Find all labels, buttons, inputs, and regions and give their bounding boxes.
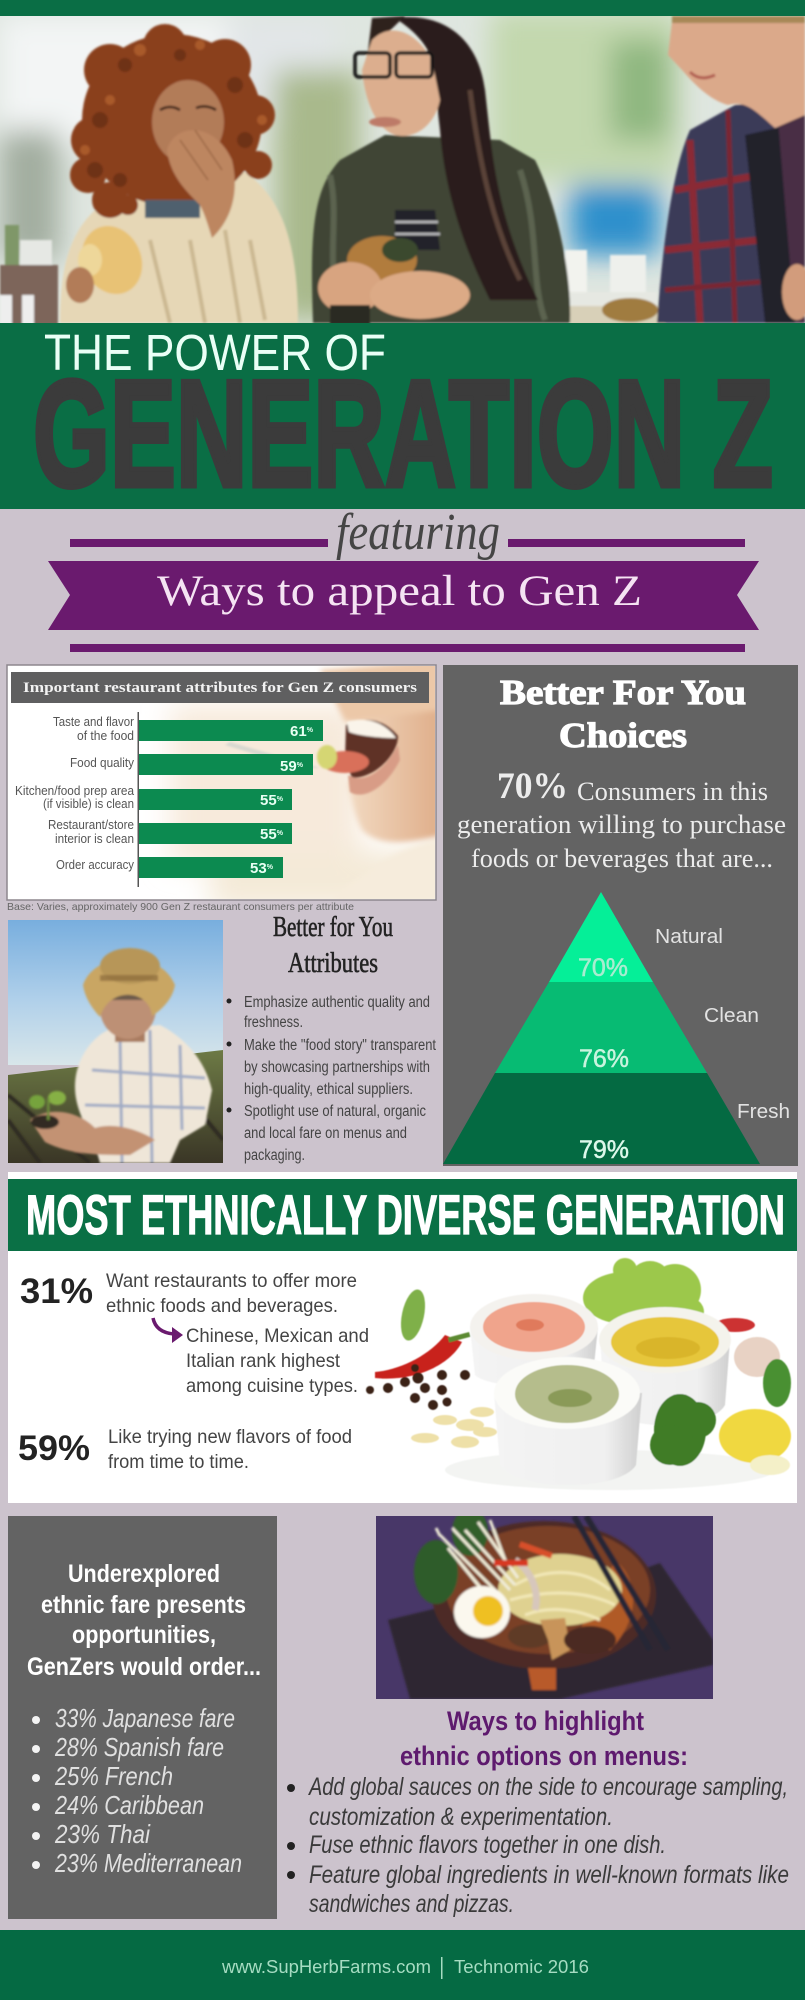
ribbon heading: Ways to appeal to Gen Z xyxy=(157,568,642,615)
pyramid chart xyxy=(443,892,760,1164)
heading: ways to highlight: ethnic options on menus: xyxy=(400,1741,688,1771)
woman two hair xyxy=(395,17,538,300)
photo: mouth eating food xyxy=(170,660,450,910)
70 percent statement xyxy=(457,766,786,873)
cuisine percentage list: 33% Japanese fare xyxy=(55,1703,235,1733)
panel heading xyxy=(27,1560,261,1681)
panel: better for you choices xyxy=(443,665,798,1166)
woman one hand xyxy=(167,130,235,238)
bar values xyxy=(250,723,314,877)
bar values: % xyxy=(297,762,304,769)
featuring ribbon xyxy=(48,504,759,652)
yellow sauce bowl xyxy=(600,1340,730,1425)
woman one burger xyxy=(82,225,144,295)
attributes bullet list: Spotlight use of natural, organic xyxy=(244,1103,426,1120)
bar values: 61 xyxy=(290,723,307,740)
menu tips bullet list: sandwiches and pizzas. xyxy=(309,1890,514,1918)
bar values: 55 xyxy=(260,826,277,843)
woman one hair xyxy=(70,24,275,218)
attributes bullet list: Make the "food story" transparent xyxy=(244,1037,437,1054)
attributes bullet list xyxy=(226,994,437,1164)
bar labels: Order accuracy xyxy=(56,857,134,872)
bar labels: (if visible) is clean xyxy=(43,796,134,811)
bar values: % xyxy=(267,864,274,871)
fence xyxy=(563,248,588,292)
base note: Base: Varies, approximately 900 Gen Z restaurant consumers per attribute xyxy=(7,902,354,913)
bar values: % xyxy=(307,727,314,734)
woman two face xyxy=(362,30,440,136)
panel: underexplored ethnic fare xyxy=(8,1516,277,1919)
photo: farmer holding seedling xyxy=(8,920,223,1163)
pyramid chart: 70% xyxy=(578,954,628,982)
chart header xyxy=(11,672,429,703)
cuisine note: Italian rank highest xyxy=(186,1350,341,1372)
choices heading xyxy=(500,673,746,755)
attributes bullet list: and local fare on menus and xyxy=(244,1125,407,1142)
bar labels: Kitchen/food prep area xyxy=(15,783,135,798)
bar labels: of the food xyxy=(77,728,134,743)
70 percent statement: 70% xyxy=(497,766,568,807)
woman one face xyxy=(152,80,224,164)
stat: 59 percent: from time to time. xyxy=(108,1451,249,1473)
panel heading: ethnic fare presents xyxy=(41,1591,246,1619)
panel heading: Underexplored xyxy=(68,1560,220,1588)
choices heading: Better For You xyxy=(500,673,746,712)
bar values: % xyxy=(277,796,284,803)
planter xyxy=(0,265,58,325)
cuisine percentage list: 23% Thai xyxy=(54,1819,151,1849)
panel: restaurant attributes chart: Important restaurant attributes for Gen Z consumers xyxy=(23,680,417,696)
woman two burger and hands xyxy=(347,236,417,284)
attributes bullet list: Emphasize authentic quality and xyxy=(244,994,430,1011)
cuisine percentage list: 28% Spanish fare xyxy=(54,1732,224,1762)
title: the power of: THE POWER OF xyxy=(44,324,386,381)
heading: better for you attributes: Attributes xyxy=(288,948,378,979)
stat: 59 percent: Like trying new flavors of food xyxy=(108,1426,352,1448)
panel: restaurant attributes chart xyxy=(7,660,450,910)
menu tips bullet list: Fuse ethnic flavors together in one dish. xyxy=(309,1831,666,1859)
attributes bullet list: freshness. xyxy=(244,1014,303,1031)
icon: purple arrow xyxy=(153,1318,183,1343)
title band xyxy=(0,323,805,519)
heading: better for you attributes xyxy=(273,912,393,979)
green sauce bowl xyxy=(494,1393,642,1485)
bar values: 59 xyxy=(280,758,297,775)
footer xyxy=(0,1930,805,2000)
bar values: 55 xyxy=(260,792,277,809)
attributes bullet list: packaging. xyxy=(244,1147,305,1164)
stat: 59 percent xyxy=(18,1426,352,1473)
70 percent statement: Consumers in this xyxy=(577,777,768,806)
stat: 59 percent: 59% xyxy=(18,1429,90,1468)
footer: Technomic 2016 xyxy=(454,1957,589,1977)
pyramid chart: 79% xyxy=(579,1136,629,1164)
70 percent statement: foods or beverages that are... xyxy=(471,844,773,873)
stat: 31 percent: Want restaurants to offer more xyxy=(106,1270,357,1292)
section heading xyxy=(8,1179,797,1251)
woman one sweater xyxy=(60,172,298,323)
pyramid labels xyxy=(655,926,790,1123)
top green bar xyxy=(0,0,805,16)
attributes bullet list: by showcasing partnerships with xyxy=(244,1059,430,1076)
menu tips bullet list: customization & experimentation. xyxy=(309,1803,613,1831)
photo: sauces in bowls xyxy=(366,1258,791,1490)
heading: ways to highlight: Ways to highlight xyxy=(447,1706,644,1736)
cuisine note: Chinese, Mexican and xyxy=(186,1325,369,1347)
bar labels: Food quality xyxy=(70,755,134,770)
pyramid labels: Fresh xyxy=(737,1101,790,1123)
heading: ways to highlight xyxy=(400,1706,688,1771)
70 percent statement: generation willing to purchase xyxy=(457,810,786,839)
man on right xyxy=(656,103,780,323)
panel: most ethnically diverse generation xyxy=(8,1172,797,1503)
stat: 31 percent xyxy=(20,1270,357,1317)
bar labels xyxy=(15,714,135,872)
bar chart xyxy=(139,720,323,878)
choices heading: Choices xyxy=(559,716,687,755)
cuisine percentage list: 24% Caribbean xyxy=(54,1790,204,1820)
footer: www.SupHerbFarms.com xyxy=(221,1957,431,1977)
cuisine percentage list xyxy=(32,1703,242,1878)
cuisine percentage list: 25% French xyxy=(54,1761,173,1791)
panel heading: GenZers would order... xyxy=(27,1653,261,1681)
featuring script: featuring xyxy=(336,504,500,561)
pyramid labels: Clean xyxy=(704,1005,759,1027)
menu tips bullet list xyxy=(287,1773,789,1918)
photo: noodle bowl xyxy=(376,1508,713,1699)
cuisine note: among cuisine types. xyxy=(186,1375,358,1397)
bar labels: Taste and flavor xyxy=(53,714,135,729)
stat: 31 percent: 31% xyxy=(20,1272,93,1311)
bar values: 53 xyxy=(250,860,267,877)
pyramid chart: 76% xyxy=(579,1045,629,1073)
ribbon shape xyxy=(48,561,759,630)
heading: better for you attributes: Better for You xyxy=(273,912,393,943)
bar labels: interior is clean xyxy=(55,831,134,846)
pyramid labels: Natural xyxy=(655,926,723,948)
panel heading: opportunities, xyxy=(72,1621,216,1649)
cuisine note xyxy=(186,1325,369,1397)
axis line xyxy=(138,712,139,887)
woman two jacket xyxy=(312,135,570,323)
attributes bullet list: high-quality, ethical suppliers. xyxy=(244,1081,413,1098)
red sauce bowl xyxy=(470,1327,598,1386)
photo: friends eating burgers xyxy=(0,10,805,326)
stat: 31 percent: ethnic foods and beverages. xyxy=(106,1295,338,1317)
cuisine percentage list: 23% Mediterranean xyxy=(54,1848,242,1878)
bar values: % xyxy=(277,830,284,837)
bar labels: Restaurant/store xyxy=(48,817,134,832)
